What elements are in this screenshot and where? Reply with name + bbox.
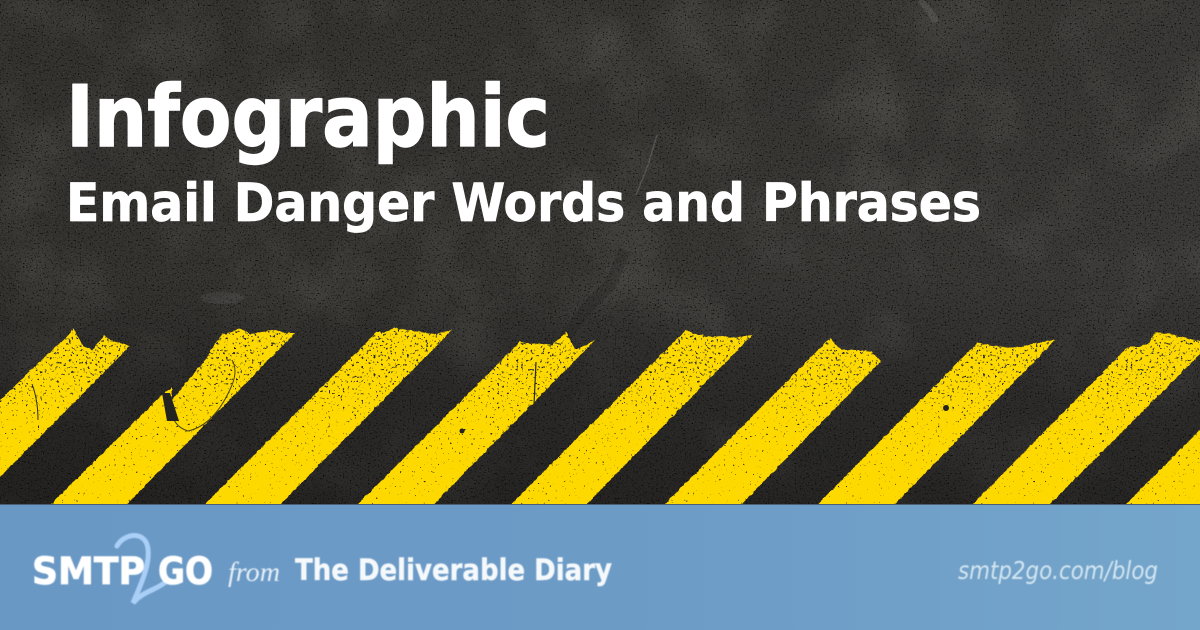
title: Infographic [66,68,550,167]
blue footer band [0,504,1200,630]
blog url: smtp2go.com/blog [958,556,1158,585]
from label: from [228,557,280,587]
blog name: The Deliverable Diary [295,553,612,587]
subtitle: Email Danger Words and Phrases [66,173,981,234]
SMTP2GO logo [32,536,213,603]
hazard stripes [0,328,1200,508]
logo word: GO: GO [158,550,213,593]
logo word: SMTP: SMTP [32,550,145,593]
logo mark: numeral 2 [117,536,167,603]
